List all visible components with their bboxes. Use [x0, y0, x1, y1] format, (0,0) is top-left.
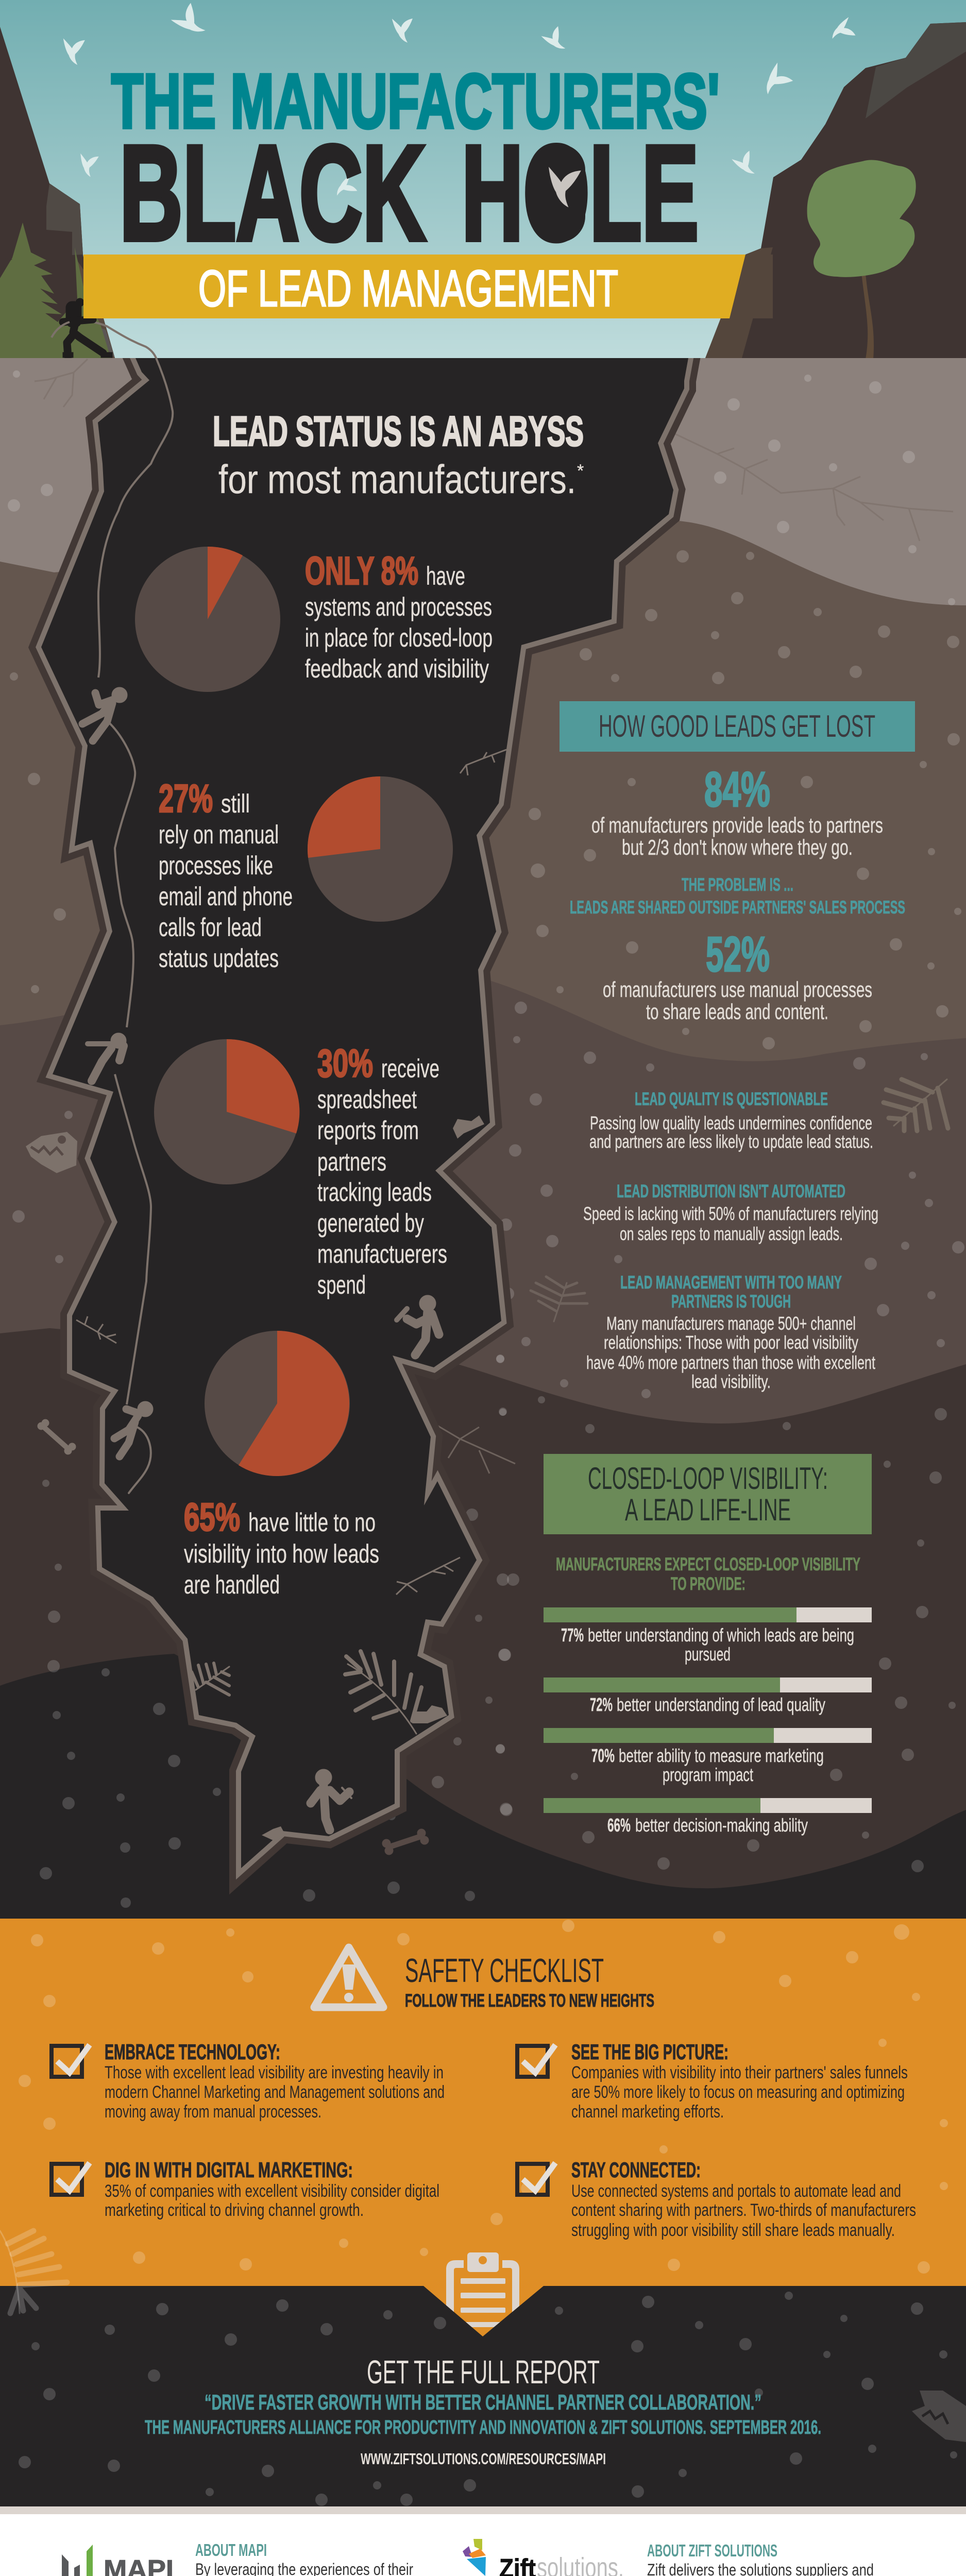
stat 30%: generated by	[317, 1209, 424, 1238]
about Zift	[647, 2541, 903, 2576]
dinosaur skull	[26, 1132, 77, 1173]
stat 27%: still	[221, 789, 250, 818]
panel heading	[560, 701, 915, 752]
stat 8%	[305, 549, 493, 683]
checklist: embrace technology: EMBRACE TECHNOLOGY:	[105, 2040, 280, 2064]
banner right cliff overlay	[730, 255, 773, 318]
dinosaur skull: footer	[912, 2391, 966, 2442]
bar 77%: 77%	[561, 1624, 584, 1646]
lead quality: LEAD QUALITY IS QUESTIONABLE	[635, 1089, 828, 1109]
twigs in abyss	[76, 750, 506, 1595]
stat 27%: email and phone	[159, 882, 293, 911]
lead management: relationships: Those with poor lead visibility	[604, 1332, 858, 1353]
cave rock layers	[0, 358, 966, 1919]
icon: warning triangle	[314, 1947, 383, 2007]
section: safety checklist background	[0, 1919, 966, 2286]
stat 30%	[317, 1042, 447, 1299]
rock specks	[8, 370, 964, 1908]
icon: checkbox	[52, 2163, 90, 2195]
checklist: stay connected: STAY CONNECTED:	[571, 2158, 701, 2182]
stat 27%: processes like	[159, 851, 273, 880]
stat 8%: have	[426, 562, 465, 590]
bar 77%: pursued	[685, 1643, 731, 1665]
heading: safety checklist: SAFETY CHECKLIST	[405, 1952, 604, 1989]
subheading: for most manufacturers.	[218, 456, 576, 502]
stat 30%: manufactuerers	[317, 1240, 447, 1268]
stat 30%: spreadsheet	[317, 1085, 417, 1114]
section: footer dark background	[0, 2286, 966, 2576]
bone 2	[382, 1829, 429, 1855]
bar 70%: better ability to measure marketing	[619, 1745, 824, 1766]
fern: in abyss right	[345, 1651, 421, 1734]
stat 30%: receive	[381, 1054, 439, 1083]
pie chart 27%	[308, 776, 453, 922]
stat 30%: reports from	[317, 1116, 419, 1145]
footnote mark: *	[577, 461, 584, 481]
bar 72%: better understanding of lead quality	[617, 1694, 825, 1715]
stat 30%: tracking leads	[317, 1178, 432, 1207]
bones	[38, 1419, 76, 1454]
stat 52%: 52%	[706, 927, 770, 982]
bar 66%	[544, 1798, 872, 1836]
bar 70%: program impact	[663, 1764, 753, 1785]
hiker silhouette with rope	[52, 298, 173, 677]
problem statement	[570, 875, 905, 918]
icon: checkbox	[517, 2045, 555, 2077]
stat text 84%	[591, 813, 883, 859]
orange notch	[423, 2286, 544, 2336]
logo: MAPI	[62, 2545, 174, 2576]
icon: clipboard	[446, 2252, 519, 2329]
checklist: see the big picture	[517, 2040, 908, 2122]
stat 65%: have little to no	[248, 1508, 376, 1537]
section: get the full report: GET THE FULL REPORT	[367, 2353, 600, 2391]
bar 70%: 70%	[591, 1745, 615, 1766]
stat 8%: feedback and visibility	[305, 654, 489, 683]
lead distribution: LEAD DISTRIBUTION ISN'T AUTOMATED	[617, 1181, 845, 1201]
lead management: Many manufacturers manage 500+ channel	[606, 1313, 856, 1334]
stat 27%	[159, 777, 293, 973]
stat 8%: ONLY 8%	[305, 549, 418, 593]
subheading: follow the leaders: FOLLOW THE LEADERS TO NEW HEIGHTS	[405, 1991, 654, 2011]
right cliff	[705, 22, 966, 358]
footer specks	[1, 2292, 957, 2576]
about MAPI	[195, 2540, 438, 2576]
pie chart 65%	[205, 1331, 350, 1476]
stat text 52%	[603, 977, 872, 1024]
rock debris	[262, 1115, 484, 1840]
checklist: dig in with digital marketing: 35% of companies with excellent visibility consider digital	[105, 2181, 439, 2201]
rope inside abyss	[98, 358, 173, 1404]
about Zift: ABOUT ZIFT SOLUTIONS	[647, 2541, 777, 2560]
stat 27%: 27%	[159, 777, 213, 821]
abyss rim and chasm	[41, 358, 688, 1868]
tree	[807, 160, 916, 359]
stat 8%: in place for closed-loop	[305, 623, 493, 652]
lead distribution	[583, 1181, 878, 1244]
bar 72%: 72%	[590, 1694, 613, 1715]
birds	[59, 3, 856, 198]
climber 2	[88, 1033, 126, 1081]
panel: about section	[0, 2514, 966, 2576]
fern: middle right	[531, 1277, 587, 1321]
branches in rock	[35, 359, 953, 1473]
bar 77%: better understanding of which leads are being	[588, 1624, 854, 1646]
checklist: embrace technology: Those with excellent lead visibility are investing heavily in	[105, 2063, 444, 2082]
stat 30%: 30%	[317, 1042, 373, 1086]
climber 4 with hammer	[397, 1295, 439, 1355]
stat 84%: 84%	[704, 762, 770, 817]
panel: closed-loop visibility	[544, 1454, 872, 1836]
bird inside the O	[541, 164, 581, 208]
panel heading: A LEAD LIFE-LINE	[625, 1493, 791, 1527]
pie chart 8%	[135, 547, 280, 692]
logo: Zift solutions	[463, 2539, 624, 2576]
pie chart 30%	[154, 1039, 299, 1184]
checklist: dig in with digital marketing	[52, 2158, 439, 2220]
orange specks	[19, 1920, 948, 2274]
title: black hole: BLACK	[120, 117, 426, 268]
stat 30%: partners	[317, 1147, 386, 1176]
divider band	[0, 2506, 966, 2514]
stat text 52%: to share leads and content.	[646, 999, 828, 1024]
climber 1	[82, 687, 127, 741]
title: of lead management: OF LEAD MANAGEMENT	[198, 260, 618, 317]
checklist: see the big picture: SEE THE BIG PICTURE:	[571, 2040, 728, 2064]
stat 8%: systems and processes	[305, 592, 492, 621]
subheading: TO PROVIDE:	[671, 1574, 745, 1594]
about MAPI: ABOUT MAPI	[195, 2540, 267, 2560]
bar 70%	[544, 1728, 872, 1785]
stat 27%: calls for lead	[159, 913, 262, 942]
checklist: see the big picture: channel marketing efforts.	[571, 2102, 724, 2122]
bar 72%	[544, 1677, 872, 1715]
checklist: stay connected	[517, 2158, 916, 2240]
stat 65%	[184, 1496, 379, 1599]
stat 27%: rely on manual	[159, 820, 279, 849]
heading: lead status	[213, 408, 584, 502]
panel: how good leads get lost	[560, 701, 915, 1392]
problem statement: THE PROBLEM IS ...	[682, 875, 793, 895]
icon: checkbox	[517, 2163, 555, 2195]
lead management: LEAD MANAGEMENT WITH TOO MANY	[620, 1273, 842, 1293]
lead management	[586, 1273, 875, 1392]
bar 66%: better decision-making ability	[635, 1815, 808, 1836]
stat 65%: are handled	[184, 1570, 280, 1599]
section: get the full report	[145, 2353, 821, 2468]
bar 66%: 66%	[607, 1815, 631, 1836]
lead management: lead visibility.	[691, 1371, 771, 1392]
fern: in abyss left	[192, 1663, 229, 1695]
checklist: embrace technology: moving away from manual processes.	[105, 2102, 321, 2122]
stat 27%: status updates	[159, 944, 279, 973]
checklist: embrace technology: modern Channel Marketing and Management solutions and	[105, 2082, 445, 2102]
fern: upper right	[884, 1079, 948, 1131]
pine trees	[0, 223, 111, 358]
stat text 84%: but 2/3 don't know where they go.	[622, 835, 853, 859]
lead distribution: on sales reps to manually assign leads.	[620, 1223, 843, 1244]
stat 65%: 65%	[184, 1496, 240, 1539]
panel heading	[544, 1454, 872, 1534]
title: black hole: HOLE	[462, 117, 699, 268]
left cliff	[0, 27, 115, 358]
heading: lead status: LEAD STATUS IS AN ABYSS	[213, 408, 584, 455]
lead management: PARTNERS IS TOUGH	[671, 1292, 791, 1312]
checklist: embrace technology	[52, 2040, 445, 2122]
title banner	[83, 255, 746, 318]
report url: WWW.ZIFTSOLUTIONS.COM/RESOURCES/MAPI	[361, 2450, 606, 2468]
sky background	[0, 0, 966, 361]
climber 3	[114, 1401, 153, 1493]
bar 77%	[544, 1607, 872, 1665]
checklist: dig in with digital marketing: marketing critical to driving channel growth.	[105, 2200, 364, 2220]
climber 5 with pick	[311, 1769, 351, 1830]
fern: orange section	[0, 2231, 67, 2313]
checklist: dig in with digital marketing: DIG IN WITH DIGITAL MARKETING:	[105, 2158, 353, 2182]
stat 30%: spend	[317, 1270, 366, 1299]
stat 65%: visibility into how leads	[184, 1539, 379, 1568]
subheading	[556, 1554, 860, 1594]
icon: checkbox	[52, 2045, 90, 2077]
lead quality	[589, 1089, 873, 1152]
